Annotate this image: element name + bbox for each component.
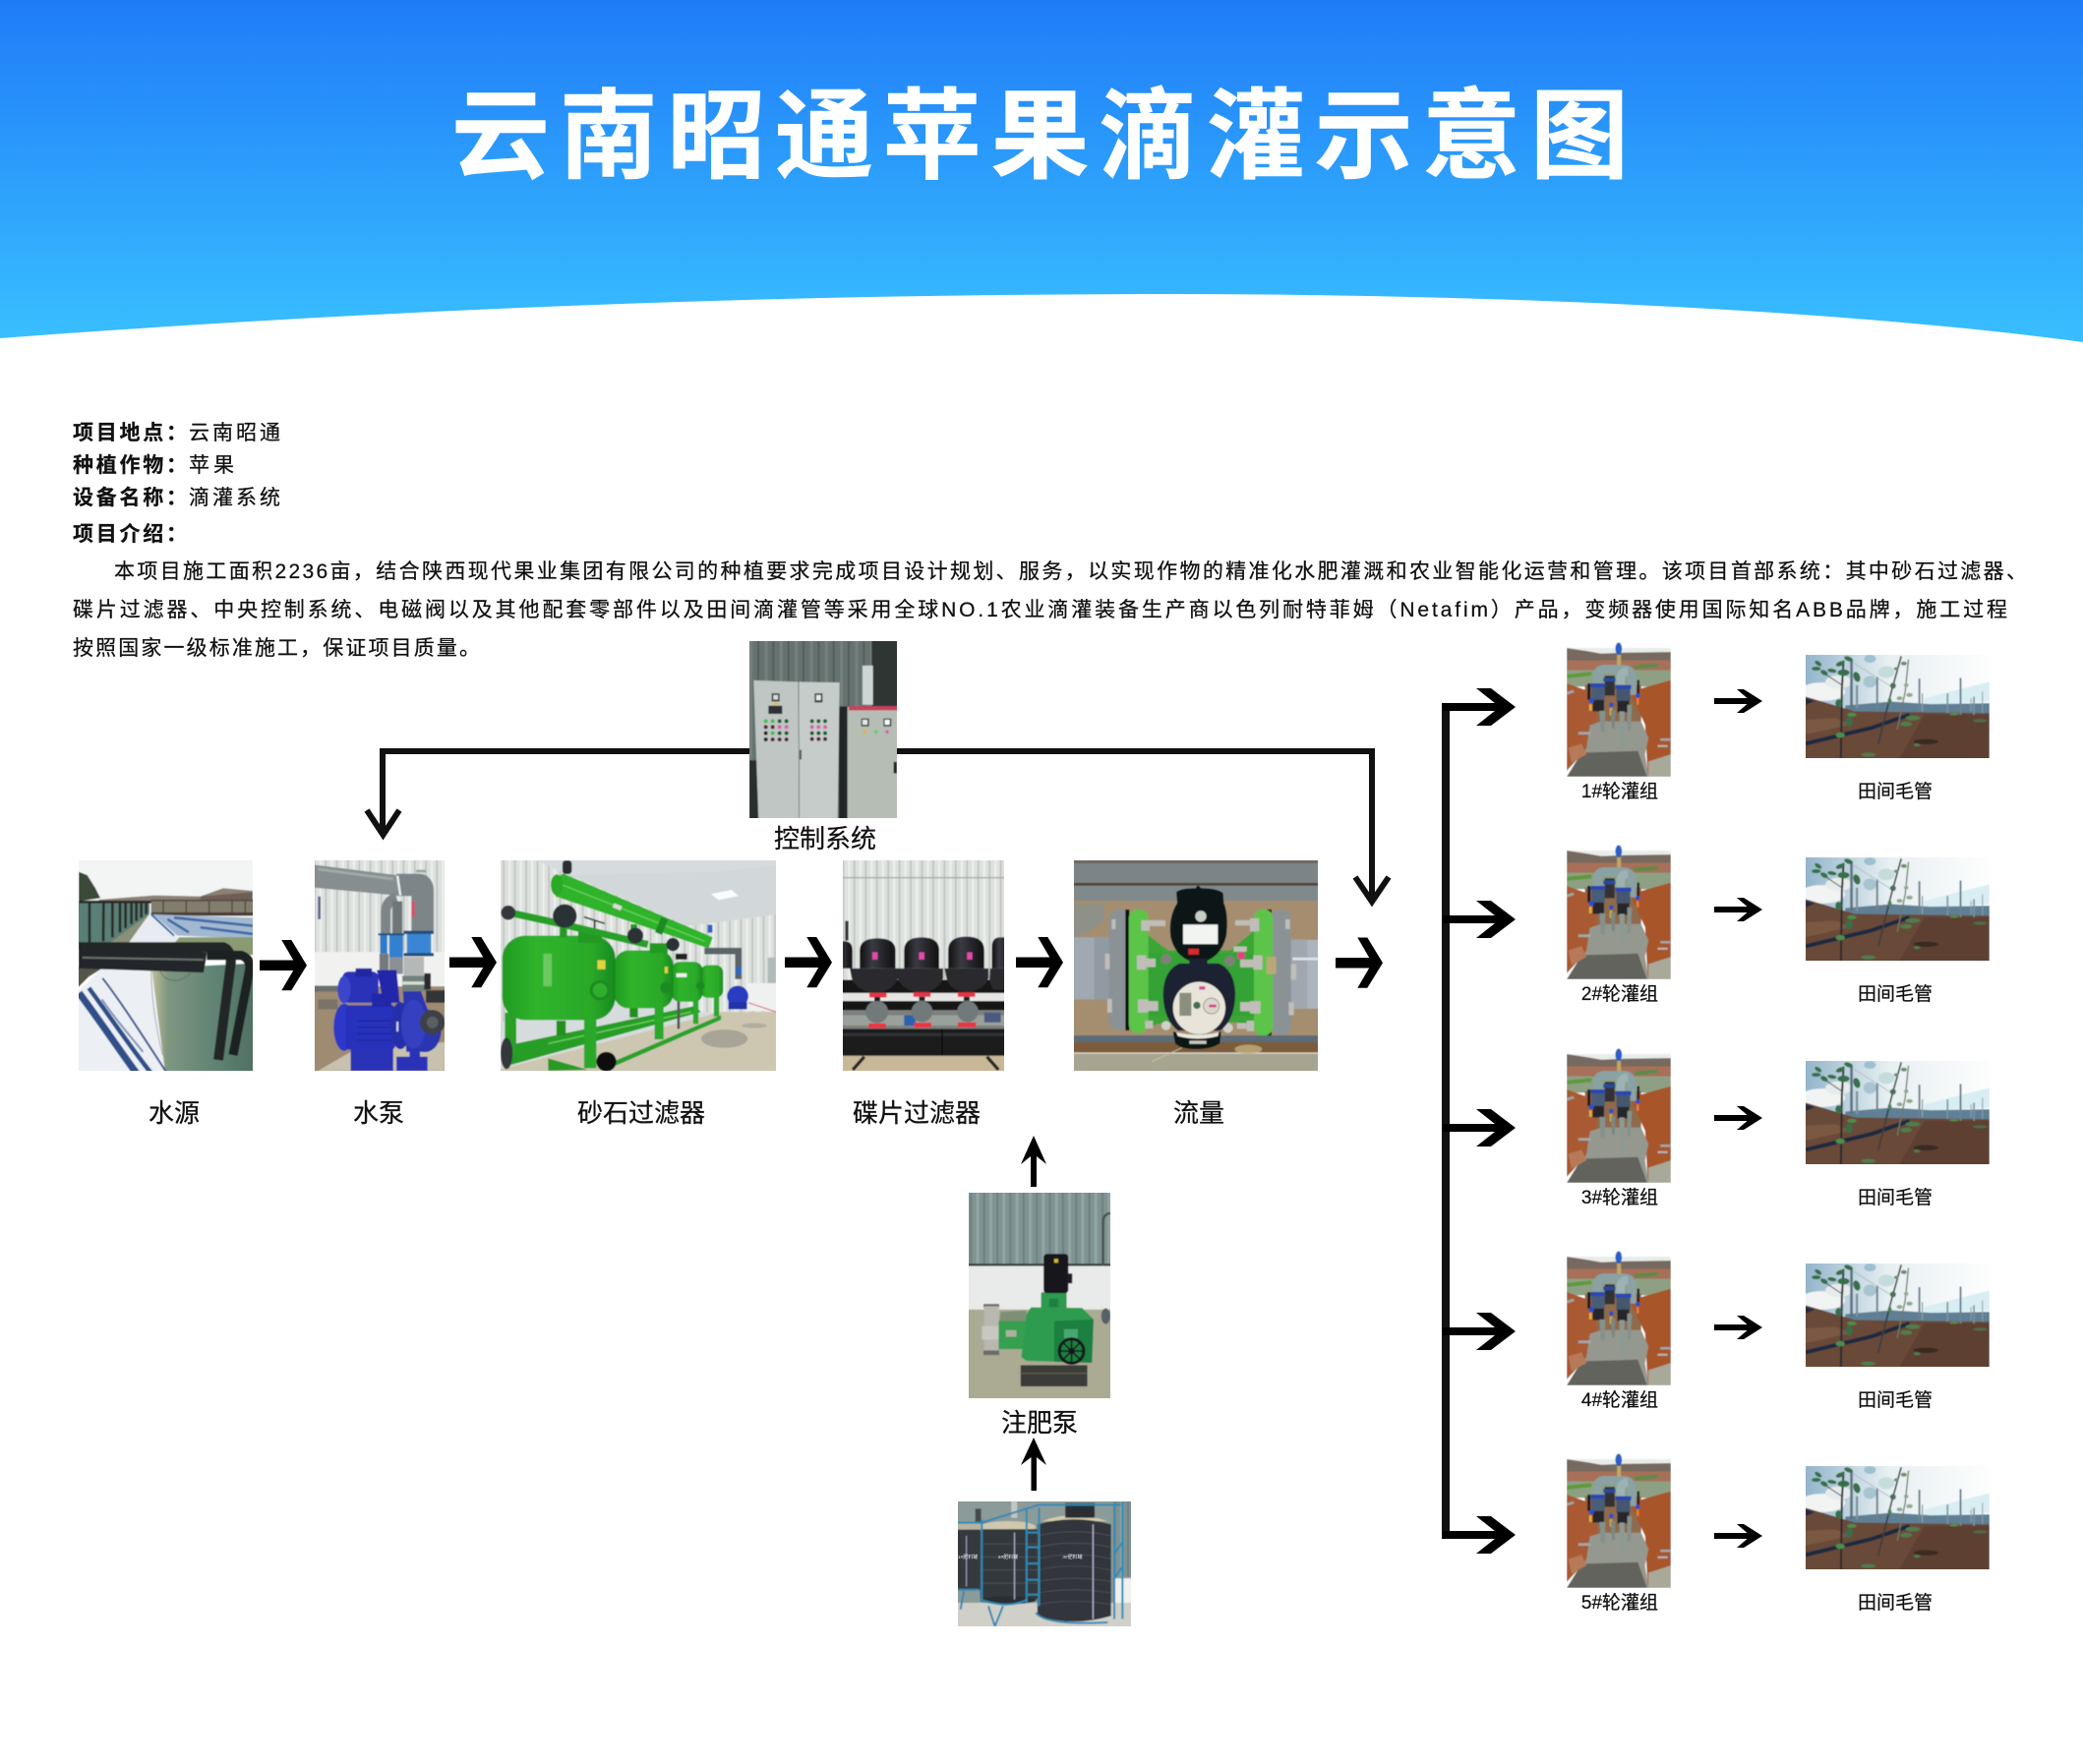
photo: rotation group 3 valves: [1567, 1048, 1671, 1183]
equipment name: 滴灌系统: [189, 487, 280, 509]
label: rotation group 5: 5#轮灌组: [1581, 1592, 1658, 1614]
photo: fertilizer tanks: 2#肥料罐: [998, 1554, 1018, 1560]
arrow: group 2 to field: [1714, 898, 1762, 921]
label: rotation group 4: 4#轮灌组: [1581, 1389, 1658, 1411]
arrow: group 3 to field: [1714, 1106, 1762, 1130]
photo: fertilizer tanks: 1#肥料罐: [958, 1554, 978, 1560]
arrow: group 5 to field: [1714, 1524, 1762, 1548]
photo: rotation group 5 valves: [1567, 1453, 1671, 1588]
project location: 云南昭通: [189, 422, 280, 444]
banner background: [0, 0, 2083, 342]
arrow: manifold to group 1: [1442, 688, 1516, 726]
label: field capillary 1: 田间毛管: [1858, 781, 1933, 802]
project info block: [73, 422, 2027, 660]
arrow: manifold to group 5: [1442, 1516, 1516, 1554]
label: water pump: 水泵: [353, 1098, 404, 1128]
label: water source: 水源: [149, 1098, 200, 1128]
photo: field drip lines 3: [1806, 1061, 1990, 1164]
label: fertilizer pump: 注肥泵: [1001, 1408, 1078, 1438]
arrow: pump to sand filter: [449, 937, 497, 987]
label: disc filter: 碟片过滤器: [853, 1098, 981, 1128]
arrow: group 1 to field: [1714, 689, 1762, 713]
label: field capillary 3: 田间毛管: [1858, 1187, 1933, 1208]
project introduction paragraph: [73, 560, 2027, 660]
project introduction heading: 项目介绍：: [73, 523, 187, 546]
photo: field drip lines 5: [1806, 1466, 1990, 1569]
group 5 row: [1559, 1450, 2000, 1614]
label: field capillary 5: 田间毛管: [1858, 1592, 1933, 1614]
arrow: tanks up to fertilizer pump: [1021, 1438, 1046, 1491]
photo: fertilizer injection pump: [969, 1193, 1110, 1398]
project introduction paragraph: 按照国家一级标准施工，保证项目质量。: [73, 637, 480, 660]
group 3 row: [1559, 1045, 2000, 1208]
arrow: control system to flow meter: [897, 751, 1389, 902]
group 4 row: [1559, 1248, 2000, 1411]
title: 云南昭通苹果滴灌示意图: [451, 82, 1629, 192]
project location: 项目地点：: [73, 422, 187, 444]
arrow: water source to pump: [260, 940, 307, 990]
photo: water pump: [315, 860, 445, 1071]
planted crop: 种植作物：: [73, 453, 187, 477]
arrow: manifold to group 2: [1442, 901, 1516, 938]
arrow: manifold to group 3: [1442, 1109, 1516, 1147]
arrow: manifold to group 4: [1442, 1313, 1516, 1350]
photo: disc filter: [843, 860, 1004, 1071]
planted crop: 苹果: [189, 454, 234, 477]
distribution manifold with five arrows: [1442, 688, 1516, 1554]
photo: fertilizer tanks: 3#肥料罐: [1062, 1554, 1083, 1560]
label: sand filter: 砂石过滤器: [577, 1098, 705, 1128]
group 2 row: [1559, 842, 2000, 1005]
photo: rotation group 4 valves: [1567, 1251, 1671, 1385]
arrow: sand filter to disc filter: [785, 937, 832, 987]
equipment name: [73, 487, 280, 509]
label: flow meter: 流量: [1173, 1098, 1224, 1128]
label: control system: 控制系统: [774, 824, 876, 853]
label: rotation group 3: 3#轮灌组: [1581, 1187, 1658, 1208]
planted crop: [73, 453, 234, 477]
photo: field drip lines 2: [1806, 857, 1990, 961]
photo: rotation group 1 valves: [1567, 642, 1671, 777]
arrow: group 4 to field: [1714, 1316, 1762, 1339]
label: field capillary 2: 田间毛管: [1858, 983, 1933, 1005]
project introduction paragraph: 本项目施工面积2236亩，结合陕西现代果业集团有限公司的种植要求完成项目设计规划、服务，以实现作物的精准化水肥灌溉和农业智能化运营和管理。该项目首部系统：其中砂石过滤器、: [114, 560, 2027, 583]
photo: water source pool: [79, 860, 253, 1071]
arrow: control system to pump: [367, 751, 749, 835]
photo: field drip lines 4: [1806, 1264, 1990, 1367]
arrow: flow meter to distribution: [1336, 938, 1383, 988]
group 1 row: [1559, 639, 2000, 802]
photo: flow meter: [1074, 860, 1318, 1071]
arrow: fertilizer pump up to main line: [1021, 1136, 1046, 1187]
photo: fertilizer tanks: [958, 1501, 1131, 1626]
photo: rotation group 2 valves: [1567, 845, 1671, 979]
project location: [73, 422, 280, 444]
label: field capillary 4: 田间毛管: [1858, 1389, 1933, 1411]
arrow: disc filter to flow meter: [1016, 937, 1063, 987]
photo: control system cabinets: [749, 641, 897, 818]
equipment name: 设备名称：: [73, 487, 187, 509]
photo: field drip lines 1: [1806, 655, 1990, 758]
label: rotation group 2: 2#轮灌组: [1581, 983, 1658, 1005]
label: rotation group 1: 1#轮灌组: [1581, 781, 1658, 802]
photo: sand filter: [501, 860, 776, 1071]
project introduction paragraph: 碟片过滤器、中央控制系统、电磁阀以及其他配套零部件以及田间滴灌管等采用全球NO.1农业滴灌装备生产商以色列耐特菲姆（Netafim）产品，变频器使用国际知名ABB品牌，施工过程: [73, 599, 2007, 621]
